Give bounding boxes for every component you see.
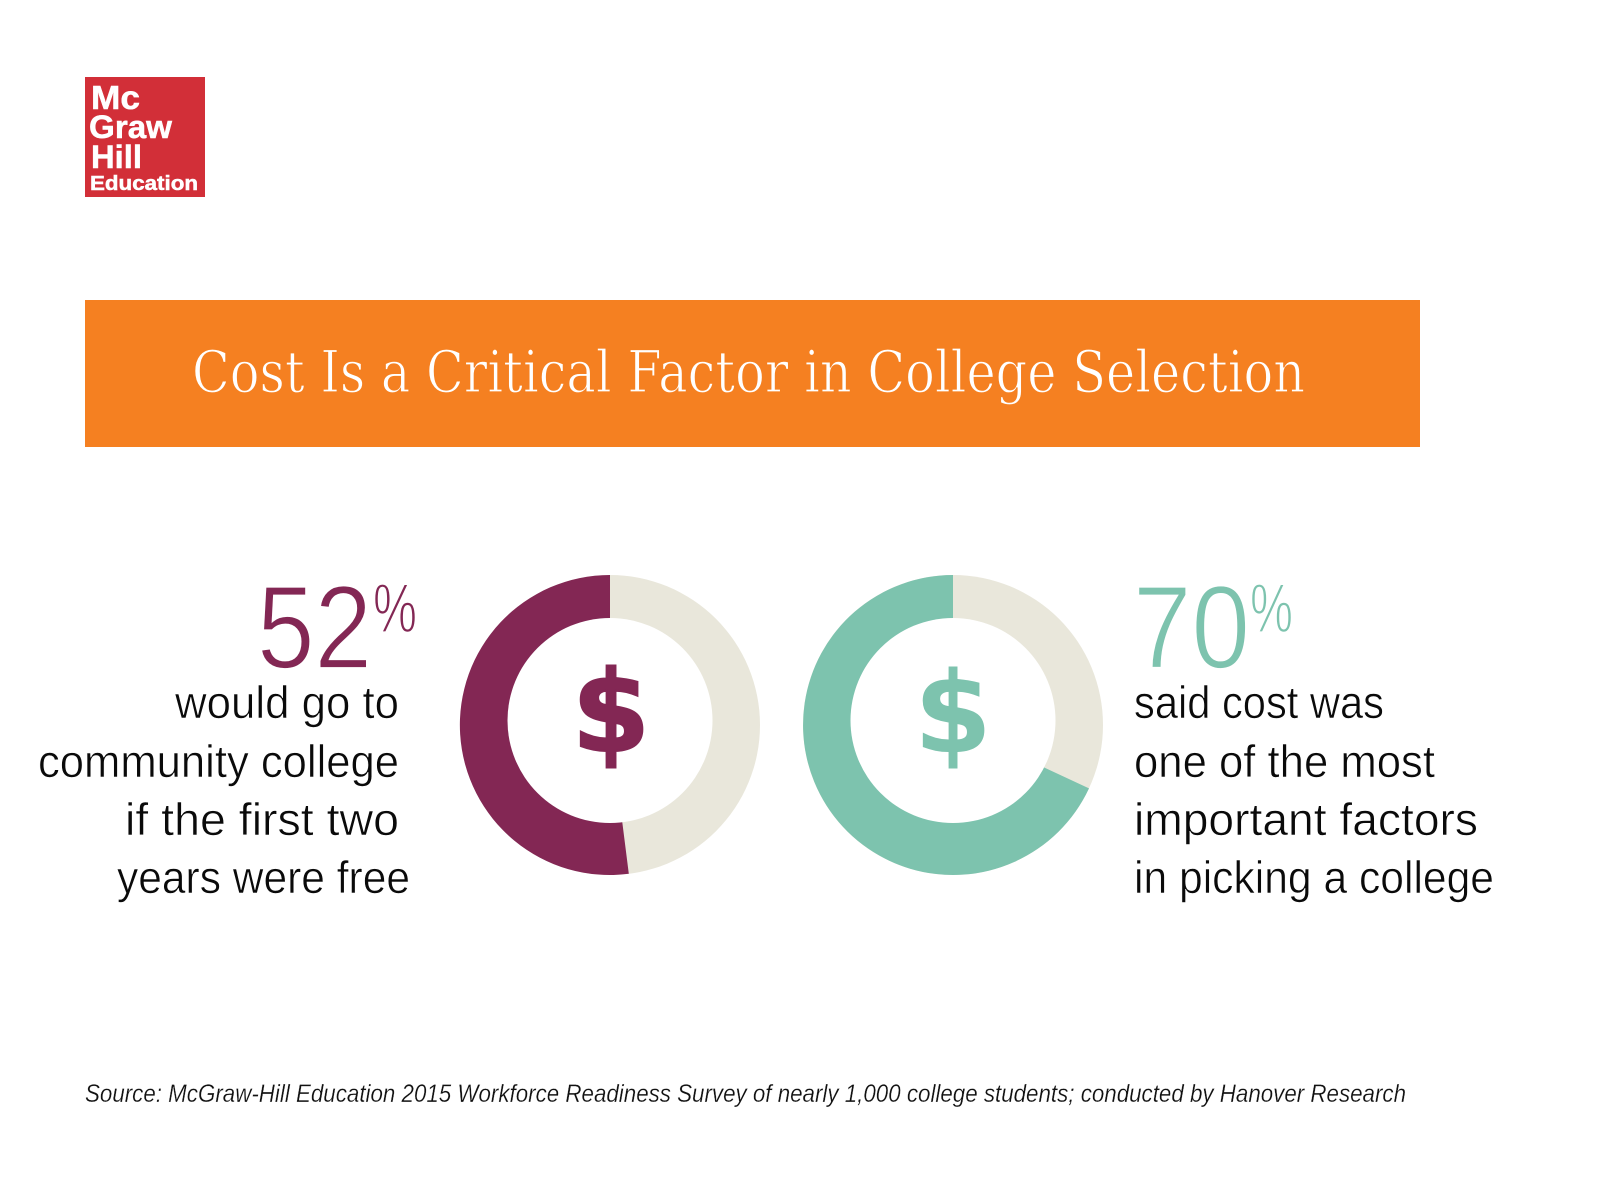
- text block: would go to community college: community college: [38, 736, 399, 787]
- text block: said cost was one of the most important factors: in picking a college: [1134, 852, 1494, 903]
- logo: McGraw Hill Education: [85, 77, 205, 197]
- logo: McGraw Hill Education: Mc: [91, 79, 140, 116]
- logo: McGraw Hill Education: Graw: [89, 109, 172, 145]
- number: 70 percent: %: [1250, 569, 1293, 647]
- logo: McGraw Hill Education: Hill: [91, 139, 142, 175]
- icon: dollar sign: $: [572, 648, 650, 778]
- text block: would go to community college: [38, 677, 410, 903]
- panel: 52 percent statistic: [38, 562, 417, 903]
- title: Cost Is a Critical Factor in College Selection: [192, 338, 1305, 406]
- donut chart: 52 percent: [460, 575, 760, 875]
- number: 52 percent: %: [373, 569, 417, 647]
- donut chart: 70 percent: [803, 575, 1103, 875]
- text block: said cost was one of the most important factors: one of the most: [1134, 736, 1435, 787]
- text block: said cost was one of the most important factors: said cost was: [1134, 677, 1384, 728]
- text block: would go to community college: would go to: [174, 677, 399, 728]
- source note: Source: McGraw-Hill Education 2015 Workforce Readiness Survey of nearly 1,000 college students; conducted by Hanover Research: [85, 1080, 1406, 1108]
- number: 52 percent: 52: [257, 562, 372, 694]
- text block: said cost was one of the most important factors: important factors: [1134, 794, 1478, 845]
- icon: dollar sign: $: [914, 649, 992, 779]
- title banner: [85, 300, 1420, 447]
- number: 70 percent: 70: [1133, 562, 1250, 694]
- logo: McGraw Hill Education: Education: [90, 173, 198, 195]
- text block: would go to community college: years were free: [117, 852, 410, 903]
- text block: said cost was one of the most important factors: [1134, 677, 1494, 903]
- text block: would go to community college: if the first two: [125, 794, 399, 845]
- panel: 70 percent statistic: [1133, 562, 1494, 903]
